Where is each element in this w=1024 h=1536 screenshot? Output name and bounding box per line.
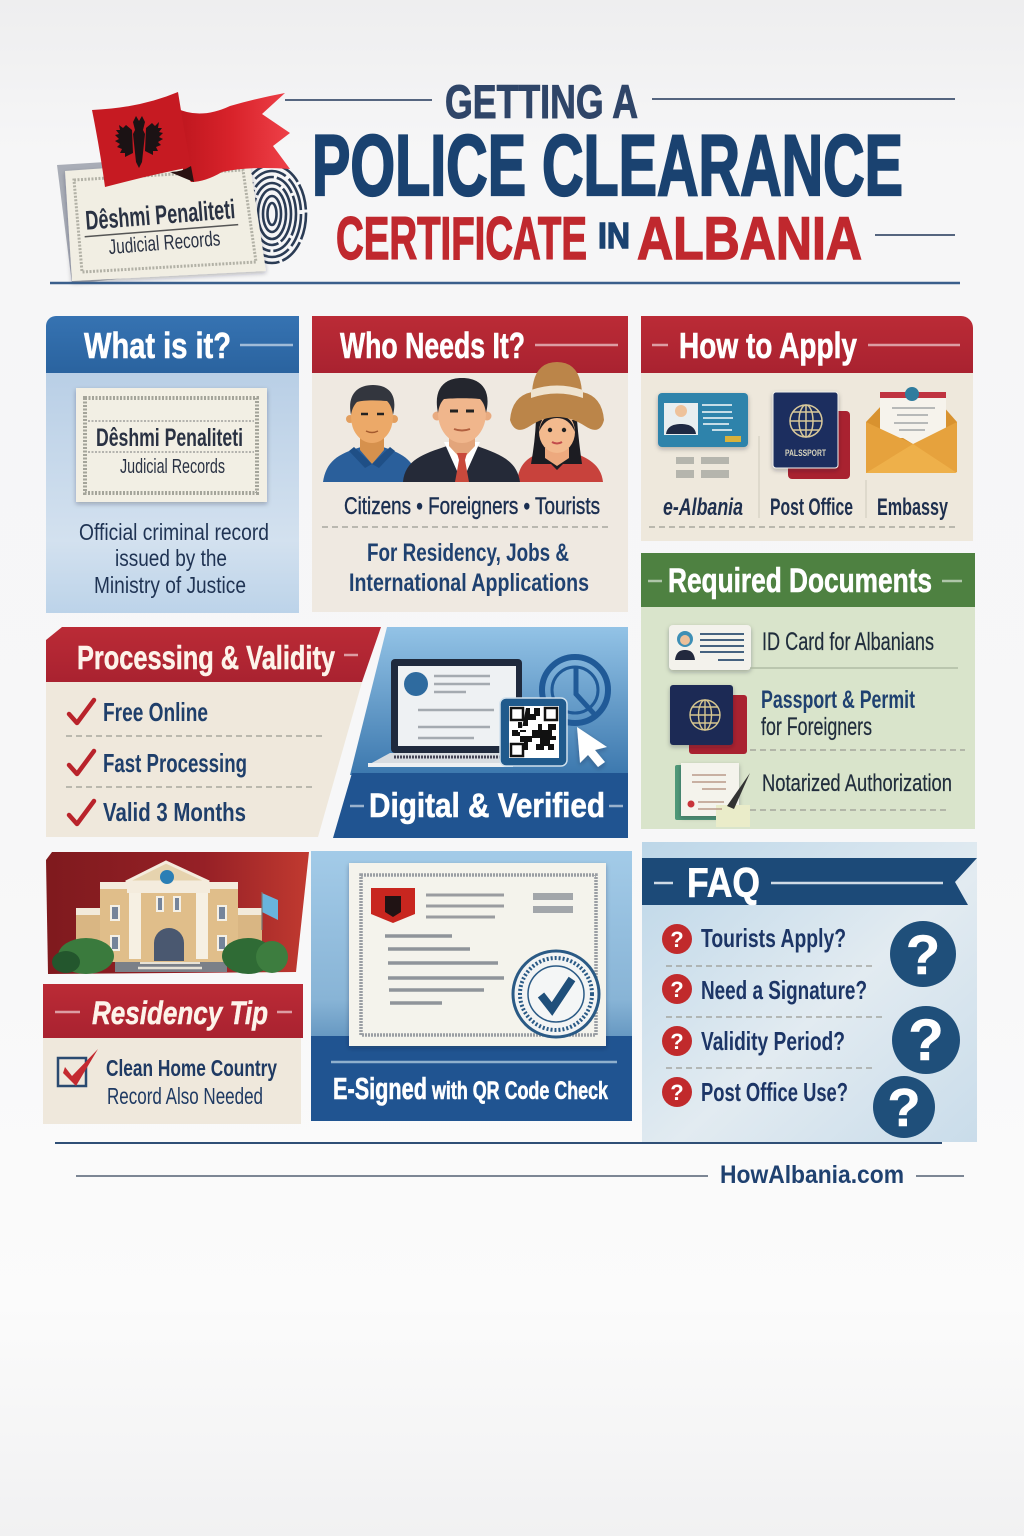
caption: e-signed: with QR Code Check: [431, 1077, 608, 1105]
panel: processing and validity: [46, 627, 381, 837]
label: passport and permit: for Foreigners: [761, 713, 872, 741]
certificate card: [76, 388, 267, 502]
title: [312, 75, 903, 272]
digital certificate document: [349, 863, 606, 1046]
heading: processing and validity: [46, 627, 381, 682]
icon: passport: PALSSPORT: [785, 448, 826, 458]
heading: processing and validity: Processing & Validity: [77, 639, 335, 676]
icon: ID card: [658, 393, 748, 478]
heading: who needs it: [312, 316, 628, 373]
heading: how to apply: How to Apply: [679, 325, 857, 366]
description: Official criminal record: [79, 519, 269, 545]
heading: what is it: [46, 316, 299, 373]
tip text: Clean Home Country: [106, 1055, 277, 1081]
people labels: Citizens • Foreigners • Tourists: [344, 493, 600, 520]
certificate text: Judicial Records: [108, 227, 221, 259]
panel: digital and verified: [333, 627, 628, 838]
certificate text: Dêshmi Penaliteti: [84, 194, 236, 236]
person: citizen: [323, 385, 419, 482]
checklist: Free Online: [103, 697, 208, 727]
panel: FAQ: [642, 842, 977, 1142]
description: [79, 519, 269, 598]
question list: ?: [670, 1029, 684, 1054]
icon: checkbox: [58, 1049, 98, 1086]
icon: QR code: [500, 698, 567, 766]
icon: clock seal: [542, 657, 608, 723]
heading: required documents: Required Documents: [668, 562, 932, 600]
tip text: Record Also Needed: [107, 1083, 263, 1109]
title line 3: ALBANIA: [637, 205, 862, 272]
seal with check mark: [513, 951, 599, 1037]
icon: fingerprint: [238, 165, 306, 263]
description: Ministry of Justice: [94, 572, 246, 598]
certificate: [65, 158, 266, 281]
heading: how to apply: [641, 316, 973, 373]
method labels: Embassy: [877, 494, 948, 521]
heading: what is it: What is it?: [84, 325, 231, 366]
icon: large question mark 3: [873, 1076, 935, 1138]
icon: large question mark 2: [892, 1006, 960, 1074]
question list: ?: [670, 927, 684, 952]
illustration: government building: [46, 852, 309, 974]
certificate back sheet: [57, 158, 180, 284]
header illustration: flag, certificate and fingerprint: [57, 92, 306, 284]
title line 3: IN: [598, 215, 630, 256]
method labels: [663, 494, 948, 521]
icon: large question mark 3: ?: [888, 1078, 920, 1138]
certificate text: [82, 194, 240, 261]
question list: ?: [670, 1080, 684, 1105]
icon: notarized document: [675, 763, 750, 827]
icon: passport small: [670, 685, 747, 754]
question list: Tourists Apply?: [701, 923, 846, 953]
method labels: e-Albania: [663, 494, 743, 521]
panel: required documents: [641, 553, 975, 829]
albanian eagle emblem: [115, 116, 163, 168]
heading: residency tip: [43, 984, 303, 1038]
checklist: Fast Processing: [103, 748, 247, 778]
icon: ID card small: [669, 625, 751, 670]
label: notarized authorization: Notarized Authorization: [762, 770, 952, 797]
banner: digital and verified: Digital & Verified: [369, 787, 605, 825]
icon: large question mark 1: [890, 921, 956, 987]
certificate card: Judicial Records: [120, 456, 225, 478]
person: man in suit: [403, 378, 520, 482]
question list: Validity Period?: [701, 1026, 845, 1056]
icon: large question mark 1: ?: [906, 923, 940, 986]
description: issued by the: [115, 545, 227, 571]
checklist: [66, 697, 322, 827]
certificate card: Dêshmi Penaliteti: [96, 424, 243, 452]
label: ID card: ID Card for Albanians: [762, 628, 934, 656]
checklist: Valid 3 Months: [103, 797, 246, 827]
panel: e-signed certificate: [311, 851, 632, 1121]
banner: digital and verified: [333, 773, 628, 838]
title line 3: CERTIFICATE: [336, 205, 587, 272]
question list: ?: [670, 977, 684, 1002]
panel: who needs it: [312, 316, 628, 612]
website: HowAlbania.com: [720, 1161, 904, 1189]
icon: laptop: [368, 659, 522, 767]
icon: passport: [773, 392, 850, 479]
heading: FAQ: [642, 858, 977, 906]
question list: Need a Signature?: [701, 975, 867, 1005]
heading: required documents: [641, 553, 975, 607]
panel: what is it: [46, 316, 299, 613]
panel: residency tip: [43, 852, 309, 1124]
title line 1: GETTING A: [445, 75, 638, 128]
label: passport and permit: Passport & Permit: [761, 686, 915, 714]
icon: envelope: [866, 387, 957, 473]
label: passport and permit: [761, 686, 915, 741]
caption: e-signed: E-Signed: [333, 1071, 427, 1106]
heading: residency tip: Residency Tip: [92, 995, 268, 1031]
question list: [662, 923, 883, 1107]
purpose text: International Applications: [349, 569, 589, 597]
heading: who needs it: Who Needs It?: [340, 325, 525, 366]
purpose text: For Residency, Jobs &: [367, 539, 569, 567]
icon: Albanian flag: [92, 92, 290, 187]
panel: how to apply: [641, 316, 973, 541]
caption: e-signed: [333, 1071, 608, 1106]
icon: large question mark 2: ?: [908, 1008, 944, 1073]
method labels: Post Office: [770, 494, 853, 521]
icon: cursor: [577, 727, 607, 767]
purpose text: [349, 539, 589, 597]
person: woman tourist: [510, 362, 604, 482]
tip text: [106, 1055, 277, 1109]
heading: FAQ: FAQ: [687, 859, 760, 906]
question list: Post Office Use?: [701, 1077, 848, 1107]
